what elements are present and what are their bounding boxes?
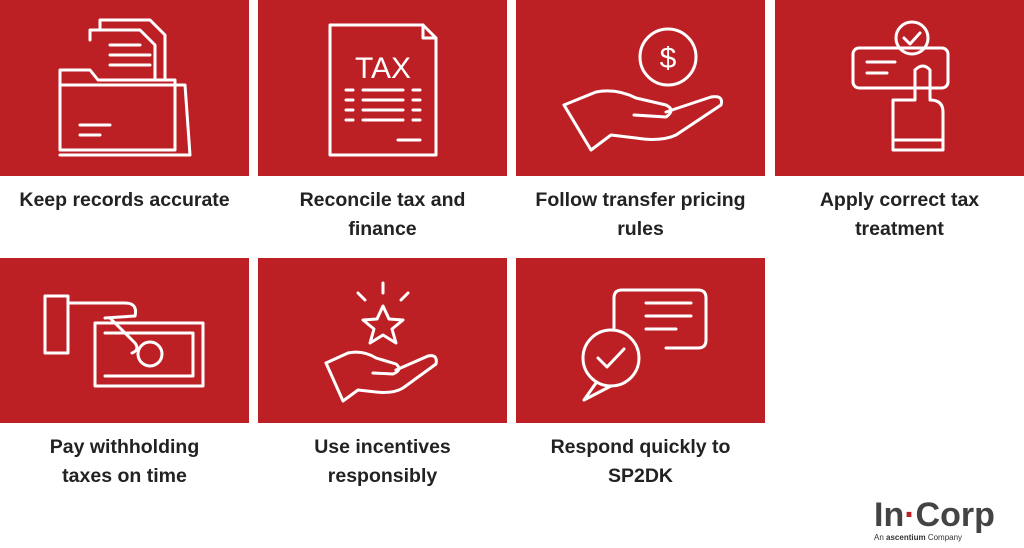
icon: speech bubble with check <box>583 290 706 400</box>
label: reconcile: Reconcile tax and <box>300 189 465 211</box>
label: incentives: responsibly <box>328 465 437 487</box>
tile: SP2DK <box>516 258 765 423</box>
icon: hand with coin <box>564 29 722 150</box>
icon: hand with star <box>326 283 436 401</box>
label: withholding: Pay withholding <box>50 436 199 458</box>
label: SP2DK: SP2DK <box>608 465 673 487</box>
label: withholding: taxes on time <box>62 465 187 487</box>
icon: folder with documents <box>60 20 190 155</box>
tile: reconcile <box>258 0 507 176</box>
icon: tax document: TAX <box>355 52 411 85</box>
icon: hand with coin: $ <box>660 42 677 75</box>
tile: withholding <box>0 258 249 423</box>
label: reconcile: finance <box>348 218 417 240</box>
label: SP2DK: Respond quickly to <box>551 436 730 458</box>
label: reconcile <box>300 189 465 240</box>
tile: apply treatment <box>775 0 1024 176</box>
tile: incentives <box>258 258 507 423</box>
label: transfer pricing <box>535 189 746 240</box>
label: incentives <box>314 436 451 487</box>
label: SP2DK <box>551 436 730 487</box>
label: keep records: Keep records accurate <box>19 189 230 211</box>
tile: transfer pricing <box>516 0 765 176</box>
label: transfer pricing: rules <box>617 218 664 240</box>
label: incentives: Use incentives <box>314 436 451 458</box>
icon: tax document <box>330 25 436 155</box>
label: withholding <box>50 436 199 487</box>
logo: InCorp: An ascentium Company <box>874 533 962 542</box>
logo: InCorp: In·Corp <box>874 496 995 534</box>
label: apply treatment <box>820 189 979 240</box>
label: transfer pricing: Follow transfer pricing <box>535 189 746 211</box>
label: apply treatment: treatment <box>855 218 944 240</box>
icon: hand with cash <box>45 296 203 386</box>
icon: finger touching checklist <box>853 22 948 150</box>
label: apply treatment: Apply correct tax <box>820 189 979 211</box>
tile: keep records <box>0 0 249 176</box>
